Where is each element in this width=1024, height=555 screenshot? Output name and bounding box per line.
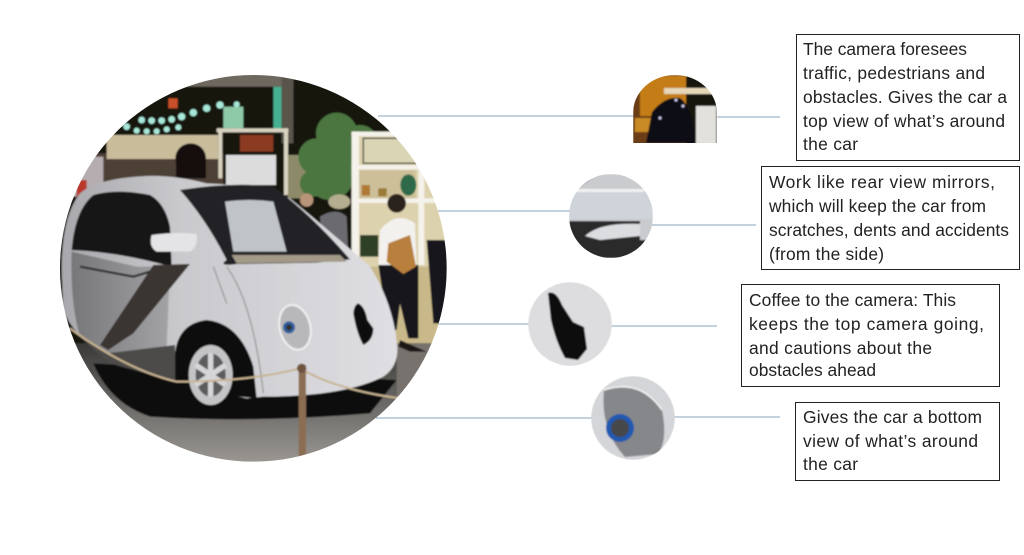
callout: top camera: top view of what’s around	[803, 111, 1005, 131]
mirror	[151, 233, 197, 252]
callout: side mirror: scratches, dents and accidents	[769, 220, 1009, 240]
car body	[62, 176, 397, 398]
people	[174, 142, 207, 162]
callout: coffee to the camera: obstacles ahead	[749, 360, 876, 380]
callout: top camera: obstacles. Gives the car a	[803, 87, 1007, 107]
callout: coffee to the camera	[742, 284, 1000, 386]
callout: bottom camera: the car	[803, 454, 858, 474]
floor strip	[370, 266, 439, 344]
shadow	[93, 363, 397, 419]
callout: side mirror: Work like rear view mirrors,	[769, 172, 995, 192]
callout: bottom camera: view of what’s around	[803, 431, 978, 451]
callout: bottom camera: Gives the car a bottom	[803, 407, 982, 427]
callout: top camera: traffic, pedestrians and	[803, 63, 985, 83]
front sensor	[278, 304, 312, 351]
background	[60, 79, 390, 344]
callout: top camera	[796, 34, 1020, 160]
callout: coffee to the camera: Coffee to the camera: This	[749, 290, 956, 310]
callout: bottom camera	[796, 402, 1000, 480]
callout: side mirror: which will keep the car from	[768, 196, 986, 216]
callout: top camera: The camera foresees	[803, 39, 967, 59]
front radar	[353, 303, 373, 345]
rope	[70, 328, 400, 398]
door and side stripe	[71, 252, 170, 353]
callout: side mirror: (from the side)	[769, 244, 884, 264]
callout: coffee to the camera: keeps the top camera going,	[749, 314, 984, 334]
detail: top camera	[633, 75, 717, 145]
string lights	[123, 101, 240, 134]
callout: coffee to the camera: and cautions about the	[749, 338, 932, 358]
callout: side mirror	[762, 166, 1020, 270]
shelves	[352, 132, 452, 268]
wheel arch and wheel	[175, 320, 257, 398]
callout: top camera: the car	[803, 134, 858, 154]
detail: side mirror	[569, 174, 653, 258]
tree	[298, 113, 378, 200]
main photo: self-driving car at an exhibition	[50, 70, 453, 470]
windows	[72, 192, 172, 267]
detail: front radar sensor	[528, 282, 612, 366]
stanchion	[299, 365, 306, 457]
detail: bottom camera	[591, 376, 675, 460]
connector lines	[376, 116, 780, 418]
